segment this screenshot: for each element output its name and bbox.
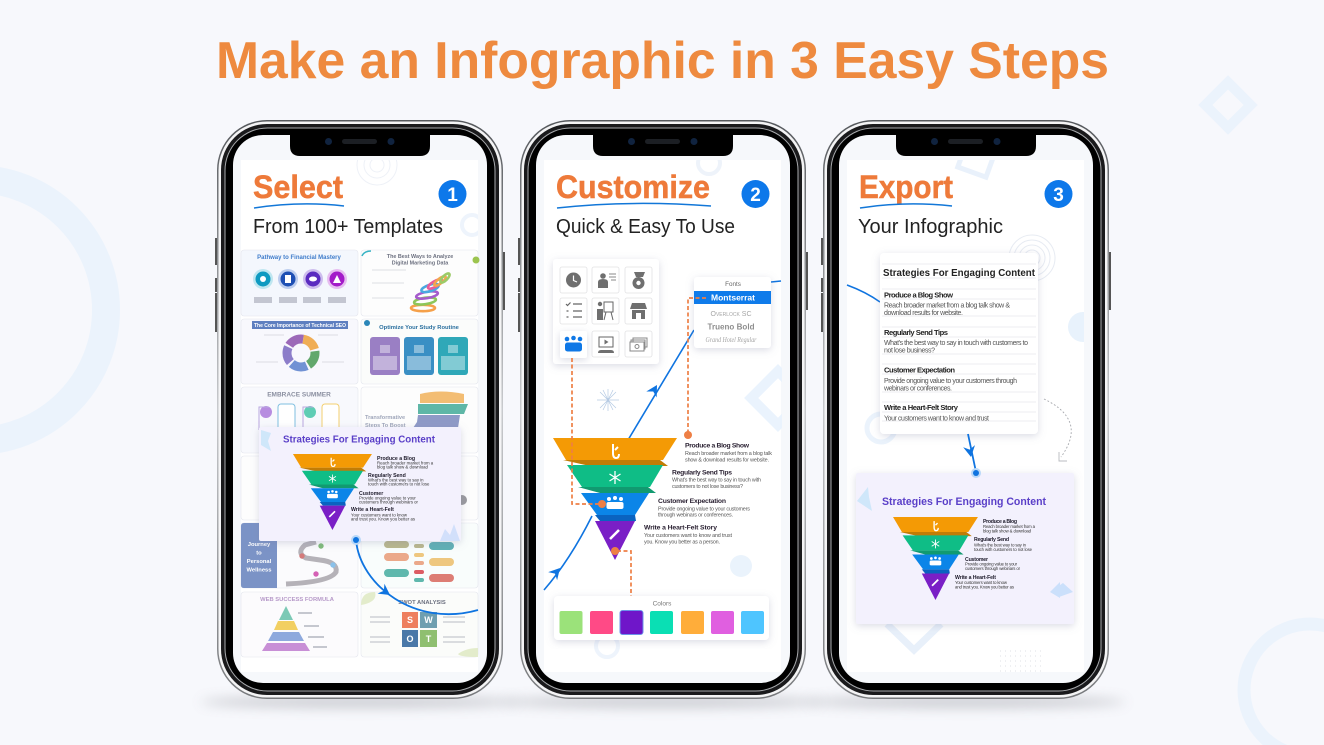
panel: exported text document: Write a Heart-Felt Story — [884, 403, 959, 412]
icon: presenter — [598, 273, 616, 288]
connectors: dashed orange — [572, 298, 706, 604]
popup: strategies for engaging content: Customer — [359, 491, 383, 497]
template card: transformative steps: Steps To Boost — [365, 423, 406, 429]
popup: strategies for engaging content: Reach broader market from a — [377, 460, 434, 466]
panel: exported infographic preview: touch with customers to not lose — [974, 547, 1033, 552]
template card: transformative steps — [361, 387, 478, 453]
popup: strategies for engaging content: What's the best way to say in — [368, 478, 424, 482]
template card: personal wellness: to — [256, 550, 262, 556]
arrow: blue curve into document — [847, 285, 880, 302]
arrow: curve from popup — [351, 535, 478, 614]
template card: personal wellness — [241, 523, 358, 588]
template card: personal wellness: Personal — [247, 559, 272, 565]
icon: medal — [632, 272, 645, 289]
heading: Select: Select — [253, 169, 343, 205]
heading: Customize: Customize — [556, 169, 710, 205]
popup: strategies for engaging content: touch with customers to not lose — [368, 482, 430, 486]
panel: exported infographic preview: and trust you. Know you better as — [955, 584, 1014, 590]
template card: personal wellness: Wellness — [246, 568, 272, 574]
panel: exported infographic preview: What's the best way to say in — [974, 542, 1027, 548]
funnel labels: Provide ongoing value to your customers — [658, 506, 750, 512]
template card: study routine: Optimize Your Study Routine — [379, 325, 460, 331]
panel: exported infographic preview: customers through webinars or — [965, 566, 1021, 571]
panel: fonts: Fonts — [725, 281, 741, 288]
panel: exported infographic preview: blog talk show & download — [983, 528, 1032, 534]
template card: transformative steps: Transformative — [365, 415, 405, 421]
panel: exported text document: webinars or conferences. — [883, 386, 952, 392]
popup: strategies for engaging content: blog talk show & download — [377, 464, 428, 470]
template card: SWOT analysis: S — [407, 615, 413, 625]
template card: embrace summer: EMBRACE SUMMER — [267, 392, 331, 398]
template card: technical SEO — [241, 319, 358, 384]
template card: financial mastery — [241, 250, 358, 316]
title: Make an Infographic in 3 Easy Steps — [216, 32, 1109, 90]
template card: pills — [361, 523, 478, 588]
panel: fonts: Overlock SC — [710, 311, 752, 318]
template card: study routine — [361, 319, 478, 384]
popup: strategies for engaging content: Produce a Blog — [377, 456, 415, 462]
panel: exported infographic preview: Reach broader market from a — [983, 524, 1036, 529]
funnel labels: customers to not lose business? — [672, 484, 743, 490]
arrows: blue arrowheads — [548, 382, 662, 580]
step badge 3: 3 — [1053, 185, 1064, 206]
panel: fonts: Trueno Bold — [708, 322, 755, 332]
phone 1: select — [200, 120, 520, 708]
panel: exported infographic preview — [856, 473, 1074, 624]
icon: money — [630, 338, 647, 351]
icon: store — [630, 303, 647, 319]
step subtitle: From 100+ Templates — [253, 216, 443, 238]
popup: strategies for engaging content: Regularly Send — [368, 473, 406, 479]
popup: strategies for engaging content: Your customers want to know — [351, 512, 408, 518]
panel: exported infographic preview: Customer — [965, 557, 988, 563]
panel: fonts — [694, 277, 771, 348]
popup: strategies for engaging content: customers through webinars or — [359, 500, 419, 504]
funnel labels: Reach broader market from a blog talk — [685, 451, 772, 457]
panel: icon picker — [553, 259, 659, 364]
panel: exported infographic preview: Strategies For Engaging Content — [882, 496, 1046, 508]
template card: web success formula — [241, 592, 358, 657]
decorations — [594, 160, 782, 659]
template card: personal wellness: Journey — [248, 542, 271, 548]
panel: exported infographic preview: Regularly Send — [974, 537, 1009, 543]
panel: colors — [554, 596, 769, 640]
funnel — [553, 438, 677, 560]
funnel labels: show & download results for website. — [685, 458, 769, 464]
step badge 2 — [742, 180, 770, 208]
step badge 1: 1 — [447, 185, 458, 206]
step subtitle: Quick & Easy To Use — [556, 216, 735, 238]
popup: strategies for engaging content: Write a Heart-Felt — [351, 507, 394, 513]
template card: digital marketing data — [361, 250, 480, 316]
popup: strategies for engaging content: and trust you. Know you better as — [351, 516, 415, 522]
heading: Export: Export — [859, 169, 953, 205]
icon: clock — [566, 272, 581, 288]
funnel labels: you. Know you better as a person. — [644, 540, 720, 546]
panel: exported text document: Produce a Blog Show — [884, 290, 953, 300]
template card: embrace summer — [241, 387, 358, 453]
phone 3: export — [806, 120, 1126, 708]
funnel labels: Write a Heart-Felt Story — [644, 524, 717, 532]
step badge 3 — [1044, 180, 1072, 208]
panel: exported text document — [880, 253, 1038, 434]
panel: exported text document: Provide ongoing value to your customers through — [884, 378, 1017, 385]
panel: colors: Colors — [653, 600, 672, 608]
panel: fonts: Montserrat — [711, 294, 755, 302]
phone 2: customize — [503, 120, 823, 708]
panel: exported text document: Your customers want to know and trust — [884, 416, 989, 422]
panel: exported text document: not lose business? — [884, 348, 935, 354]
icon: video class — [598, 337, 614, 353]
template card: SWOT analysis: T — [426, 634, 432, 644]
arrow: blue path behind funnel — [544, 281, 781, 590]
panel: exported text document: Reach broader market from a blog talk show & — [884, 302, 1010, 310]
icon: checklist — [566, 302, 582, 317]
template card: digital marketing data: Digital Marketing Data — [392, 260, 449, 266]
step badge 2: 2 — [750, 185, 761, 206]
template card: SWOT analysis: W — [424, 615, 433, 625]
panel: exported infographic preview: Write a Heart-Felt — [955, 575, 996, 581]
template card: technical SEO: The Core Importance of Technical SEO — [254, 323, 346, 329]
template card: digital marketing data: The Best Ways to Analyze — [387, 254, 453, 260]
panel: exported text document: Strategies For Engaging Content — [883, 268, 1036, 279]
funnel labels: Customer Expectation — [658, 498, 726, 505]
template card: financial mastery: Pathway to Financial Mastery — [257, 255, 342, 261]
decorations — [867, 139, 1098, 671]
funnel labels: Your customers want to know and trust — [644, 533, 732, 539]
panel: fonts: Grand Hotel Regular — [706, 336, 757, 344]
step subtitle: Your Infographic — [858, 216, 1003, 238]
popup: strategies for engaging content: Provide ongoing value to your — [359, 496, 416, 500]
icon: team highlighted — [565, 336, 582, 352]
panel: exported infographic preview: Produce a Blog — [983, 519, 1017, 525]
funnel labels: Produce a Blog Show — [685, 442, 750, 450]
funnel labels: through webinars or conferences. — [658, 512, 733, 518]
icon: teacher at board — [597, 302, 613, 320]
panel: exported text document: Customer Expectation — [884, 366, 955, 374]
funnel labels: Regularly Send Tips — [672, 470, 732, 476]
panel: exported text document: What's the best way to say in touch with customers to — [884, 340, 1028, 347]
template card: SWOT analysis: O — [406, 634, 414, 644]
panel: exported text document: download results for website. — [884, 310, 963, 317]
template card: SWOT analysis: SWOT ANALYSIS — [398, 600, 446, 606]
arrow: document to preview — [963, 434, 981, 478]
funnel labels — [644, 442, 772, 546]
step badge 1 — [438, 180, 466, 208]
template card: web success formula: WEB SUCCESS FORMULA — [260, 597, 335, 603]
panel: exported infographic preview: Your customers want to know — [955, 580, 1008, 585]
popup: strategies for engaging content: Strategies For Engaging Content — [283, 434, 436, 446]
template cards: hidden row — [241, 456, 478, 520]
funnel labels: What's the best way to say in touch with — [672, 478, 761, 484]
panel: exported text document: Regularly Send Tips — [884, 328, 948, 337]
panel: exported infographic preview: Provide ongoing value to your — [965, 562, 1018, 566]
template card: SWOT analysis — [361, 592, 478, 657]
popup: strategies for engaging content — [259, 427, 461, 541]
